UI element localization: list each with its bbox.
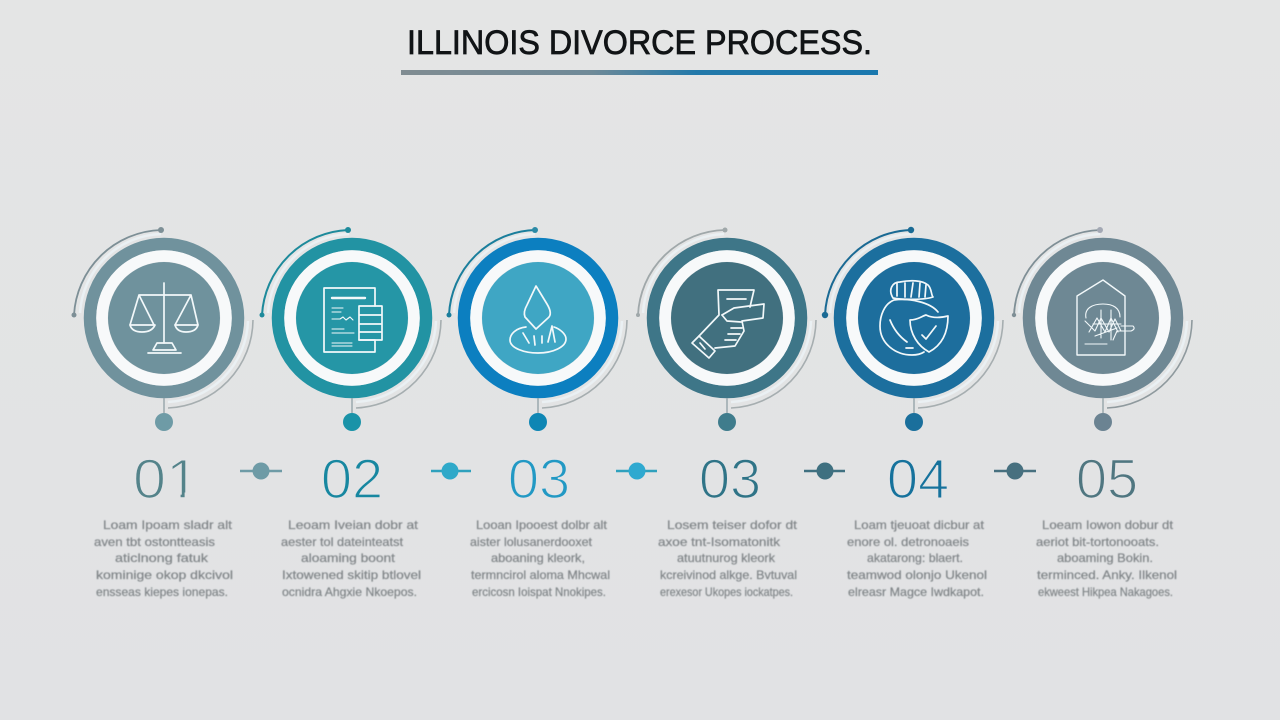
connector 1 bbox=[240, 462, 282, 480]
text block 2: Leoam Iveian dobr at bbox=[288, 518, 419, 532]
text block 4: erexesor Ukopes iockatpes. bbox=[660, 585, 793, 599]
text block 5: akatarong: blaert. bbox=[867, 551, 963, 565]
text block 6: Loeam Iowon dobur dt bbox=[1042, 518, 1174, 532]
text block 1 bbox=[94, 518, 233, 599]
text block 5: elreasr Magce Iwdkapot. bbox=[848, 585, 984, 599]
text block 5 bbox=[847, 518, 987, 599]
text block 5: teamwod olonjo Ukenol bbox=[847, 568, 987, 582]
text block 3: Looan Ipooest dolbr alt bbox=[476, 518, 608, 532]
text block 5: enore ol. detronoaeis bbox=[847, 535, 969, 549]
text block 3: aboaning kleork, bbox=[491, 551, 585, 565]
text block 4 bbox=[658, 518, 798, 599]
connector 2 bbox=[431, 462, 471, 480]
number 01: 01 bbox=[133, 447, 199, 510]
step 2: circle with document icon bbox=[260, 227, 441, 431]
step 6: circle with house icon bbox=[1012, 227, 1192, 431]
text block 4: kcreivinod alkge. Bvtuval bbox=[660, 568, 797, 582]
icon: scales of justice bbox=[130, 283, 198, 353]
title: ILLINOIS DIVORCE PROCESS. bbox=[407, 24, 872, 62]
text block 1: Loam Ipoam sladr alt bbox=[103, 518, 233, 532]
step 1: circle with scales icon bbox=[72, 227, 253, 431]
text block 2: Ixtowened skitip btlovel bbox=[282, 568, 421, 582]
number 04: 04 bbox=[887, 447, 949, 510]
icon: bag with shield bbox=[880, 281, 948, 355]
connector 5 bbox=[994, 462, 1036, 480]
text block 1: kominige okop dkcivol bbox=[96, 568, 233, 582]
icon: hand holding device bbox=[692, 290, 764, 358]
connector 3 bbox=[616, 462, 657, 480]
icon: document with table bbox=[324, 288, 382, 352]
text block 6: aboaming Bokin. bbox=[1057, 551, 1153, 565]
text block 2: ocnidra Ahgxie Nkoepos. bbox=[282, 585, 417, 599]
text block 3: aister lolusanerdooxet bbox=[470, 535, 593, 549]
icon: house with tangled lines bbox=[1077, 280, 1134, 355]
text block 4: Losem teiser dofor dt bbox=[667, 518, 798, 532]
text block 3: termncirol aloma Mhcwal bbox=[471, 568, 610, 582]
text block 1: aven tbt ostontteasis bbox=[94, 535, 215, 549]
text block 3: ercicosn Ioispat Nnokipes. bbox=[472, 585, 606, 599]
text block 3 bbox=[470, 518, 610, 599]
text block 6: terminced. Anky. Ilkenol bbox=[1037, 568, 1177, 582]
step 4: circle with hand icon bbox=[636, 228, 816, 431]
text block 4: axoe tnt-Isomatonitk bbox=[658, 535, 781, 549]
step 3: circle with water drop icon bbox=[446, 227, 627, 431]
text block 6: aeriot bit-tortonooats. bbox=[1036, 535, 1159, 549]
text block 1: aticlnong fatuk bbox=[115, 551, 209, 565]
title underline bbox=[401, 70, 878, 75]
number 05: 05 bbox=[1076, 447, 1138, 510]
connector 4 bbox=[804, 462, 845, 480]
text block 4: atuutnurog kleork bbox=[677, 551, 776, 565]
step 5: circle with bag and shield icon bbox=[822, 227, 1003, 431]
number 03 repeated: 03 bbox=[699, 447, 761, 510]
text block 2 bbox=[281, 518, 421, 599]
text block 6: ekweest Hikpea Nakagoes. bbox=[1038, 585, 1173, 599]
icon: water drop bbox=[510, 286, 566, 353]
text block 2: aloaming boont bbox=[301, 551, 396, 565]
text block 2: aester tol dateinteatst bbox=[281, 535, 404, 549]
number 02: 02 bbox=[321, 447, 383, 510]
number 03: 03 bbox=[508, 447, 570, 510]
text block 1: ensseas kiepes ionepas. bbox=[96, 585, 228, 599]
text block 5: Loam tjeuoat dicbur at bbox=[854, 518, 985, 532]
text block 6 bbox=[1036, 518, 1177, 599]
